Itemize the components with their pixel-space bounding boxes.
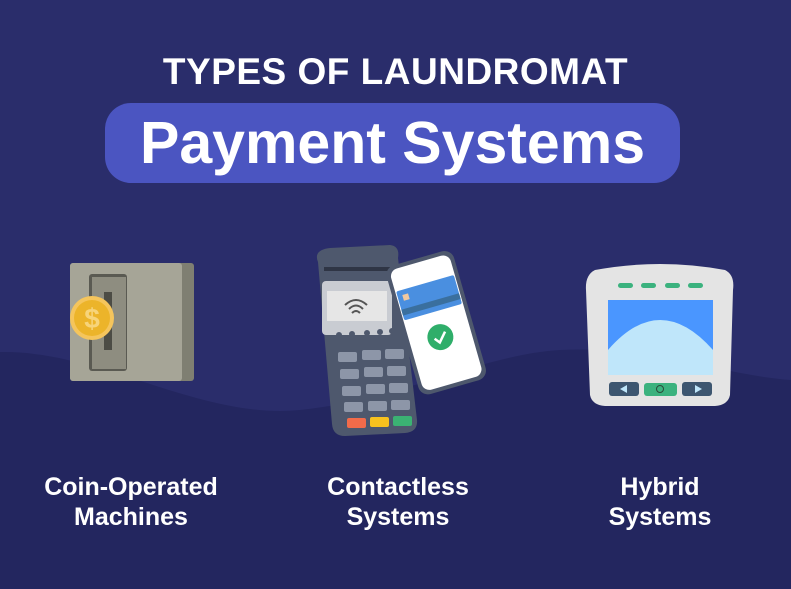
label: coin-operated: Coin-Operated	[44, 473, 218, 501]
label: coin-operated	[44, 473, 218, 531]
label: contactless: Contactless	[327, 473, 469, 501]
title: TYPES OF LAUNDROMAT	[163, 51, 628, 92]
label: coin-operated: Machines	[74, 503, 188, 531]
label: hybrid	[609, 473, 711, 531]
icon: coin machine	[70, 263, 194, 381]
icon: contactless terminal and phone	[317, 245, 486, 436]
icon: coin machine: $	[84, 303, 100, 334]
heading pill: Payment Systems	[140, 110, 645, 176]
label: hybrid: Hybrid	[620, 473, 700, 501]
label: contactless	[327, 473, 469, 531]
label: contactless: Systems	[347, 503, 449, 531]
label: hybrid: Systems	[609, 503, 711, 531]
icon: hybrid kiosk	[586, 264, 734, 406]
